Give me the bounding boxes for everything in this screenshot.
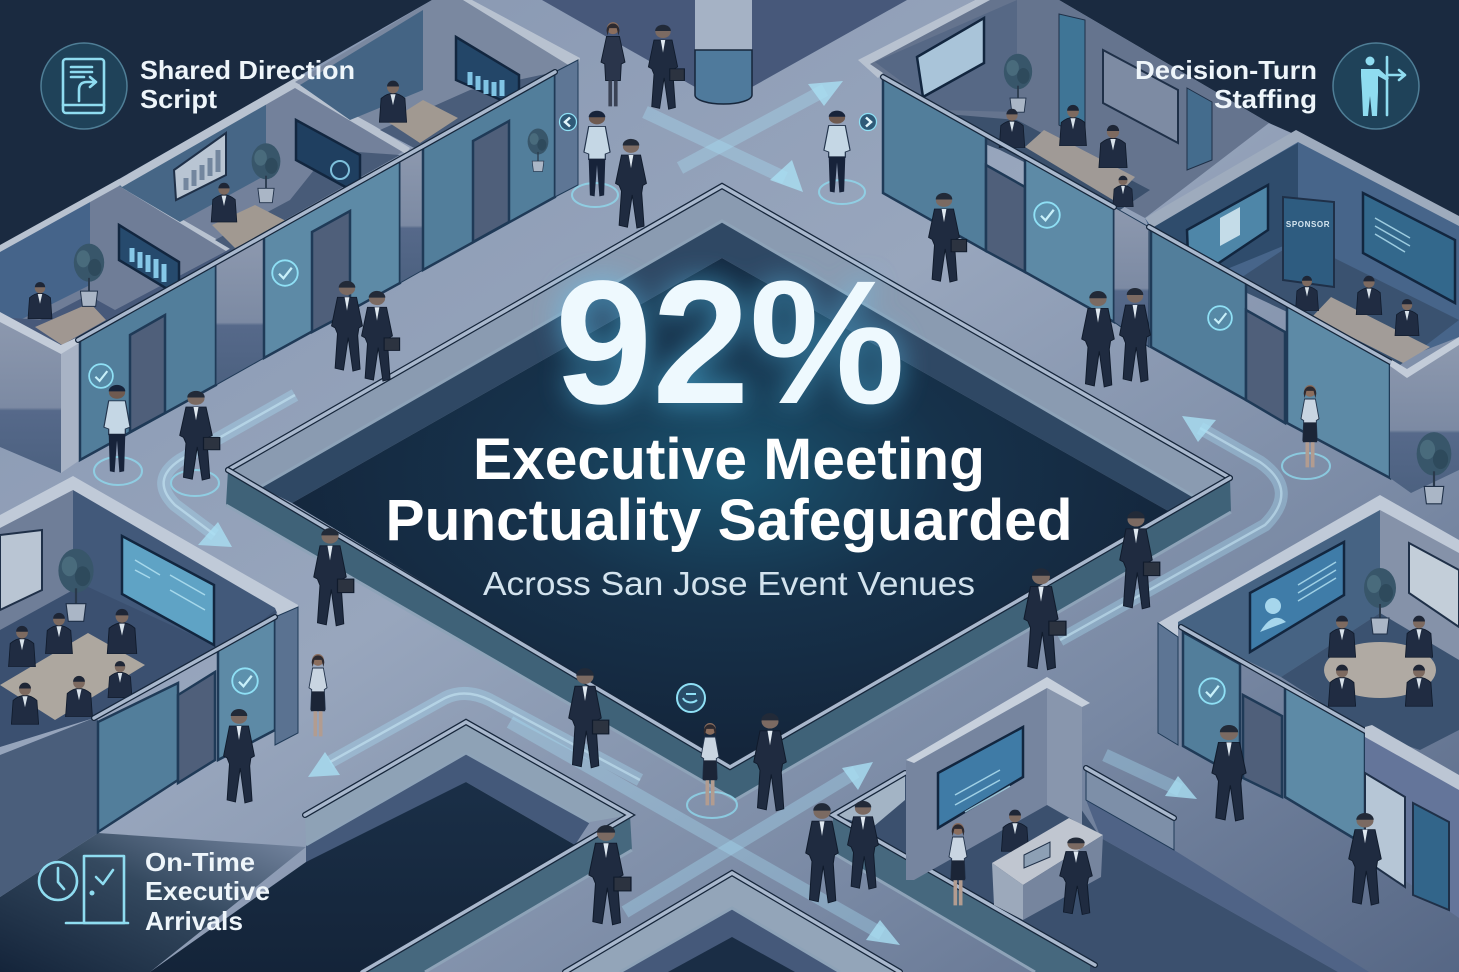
near glass band xyxy=(226,470,1231,800)
label: Staffing xyxy=(1214,84,1317,114)
end wall block xyxy=(0,312,84,473)
label: Executive xyxy=(145,876,270,906)
arrow: top right xyxy=(680,81,843,168)
central column and back floor xyxy=(542,0,907,104)
label: Decision-Turn xyxy=(1135,55,1317,85)
panel: bottom-right meeting room xyxy=(1158,495,1459,918)
arrow: lower crossing xyxy=(510,722,900,945)
panel: top-left offices xyxy=(0,0,580,473)
sponsor room xyxy=(1145,130,1459,365)
room A xyxy=(0,179,240,350)
guidance arrows xyxy=(164,81,1281,945)
badge: on-time executive arrivals xyxy=(39,847,270,936)
arrow: left curve xyxy=(164,395,295,547)
label: Script xyxy=(140,84,217,114)
arrow: top crossing xyxy=(645,112,803,192)
back inner wall xyxy=(260,221,1195,512)
check badges xyxy=(89,114,576,388)
void xyxy=(292,258,1170,767)
panel: top-right offices xyxy=(858,0,1459,504)
conference room xyxy=(858,0,1269,218)
end wall block right xyxy=(1390,337,1459,493)
heading xyxy=(386,427,1072,553)
plant right xyxy=(1417,432,1451,504)
icon: tablet with turn arrow xyxy=(41,43,127,129)
label xyxy=(1135,55,1317,114)
arrow: lower left xyxy=(308,693,640,780)
badge: shared direction script xyxy=(41,43,355,129)
label xyxy=(140,55,355,114)
check badge xyxy=(232,668,258,694)
badge: decision-turn staffing xyxy=(1135,43,1419,129)
speech bubble icon xyxy=(677,684,705,712)
bottom centre well xyxy=(565,873,900,972)
hero stat: 92%: 92% xyxy=(555,245,905,441)
glass partitions xyxy=(883,77,1392,478)
label: On-Time xyxy=(145,847,255,877)
sponsor banner text: SPONSOR xyxy=(1286,220,1330,229)
room C xyxy=(295,0,580,150)
label xyxy=(145,847,270,936)
hero stat: 92%: 92% xyxy=(555,245,905,441)
subheading: Across San Jose Event Venues xyxy=(483,565,975,602)
back glass band xyxy=(228,186,1230,497)
label: Arrivals xyxy=(145,906,243,936)
panel: bottom-left meeting room xyxy=(0,476,298,897)
reception floor xyxy=(833,760,1369,972)
check badge xyxy=(1199,678,1225,704)
heading: Punctuality Safeguarded xyxy=(386,488,1072,553)
heading: Executive Meeting xyxy=(473,427,985,492)
icon: staff member with direction sign xyxy=(1333,43,1419,129)
arrow: lower right xyxy=(1105,755,1197,799)
glass partitions xyxy=(78,60,578,460)
arrow: right curve xyxy=(1060,416,1281,640)
reception wall and desk xyxy=(906,677,1174,920)
central void with glass railing xyxy=(226,186,1231,800)
bottom pit with rail xyxy=(150,722,632,972)
check badges xyxy=(860,114,1232,330)
floor rings xyxy=(94,180,1330,818)
room B xyxy=(116,78,410,250)
label: Shared Direction xyxy=(140,55,355,85)
icon: clock and door xyxy=(39,856,128,923)
